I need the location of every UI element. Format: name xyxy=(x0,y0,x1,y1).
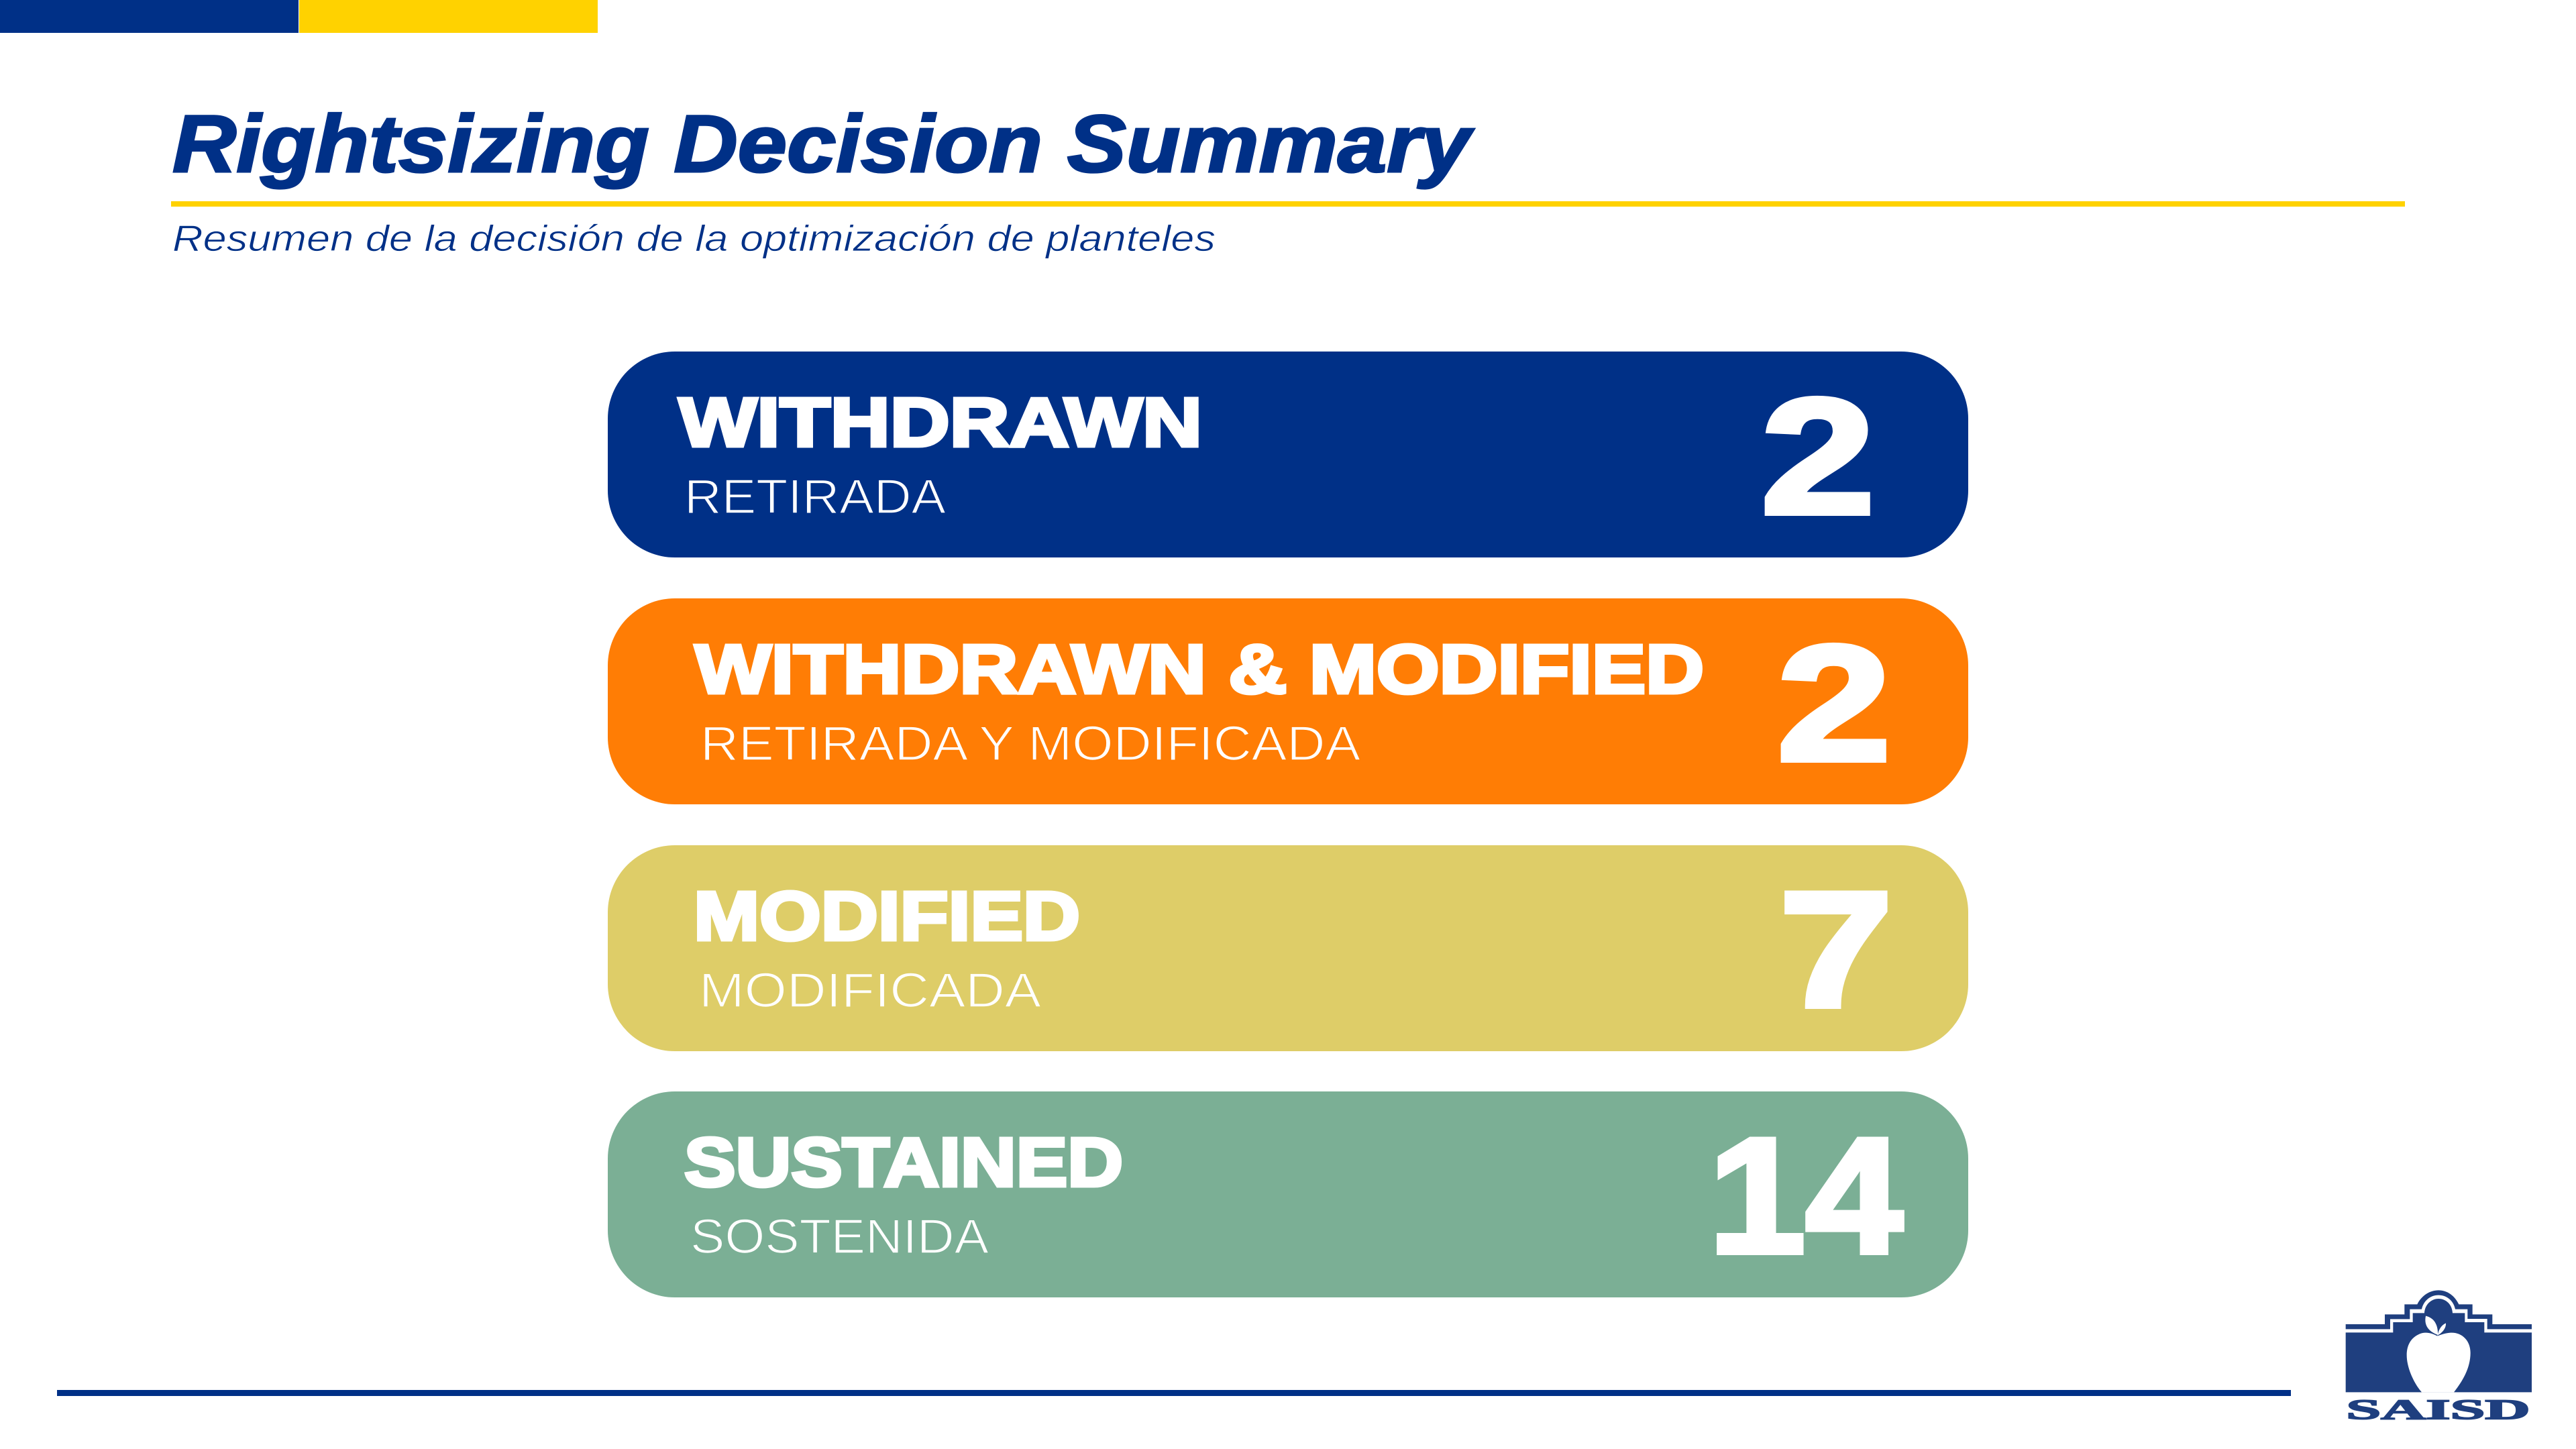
icon: SAISD logo: SAISD xyxy=(2346,1395,2530,1426)
number: 7: 7 xyxy=(1779,857,1893,1041)
title: Rightsizing Decision Summary xyxy=(172,98,1474,189)
heading: withdrawn and modified: WITHDRAWN & MODIFIED xyxy=(695,631,1704,708)
number: 2: 2 xyxy=(1761,364,1875,548)
top accent bars xyxy=(0,0,598,33)
footer line xyxy=(57,1390,2291,1396)
subtitle: Resumen de la decisión de la optimización de planteles xyxy=(172,217,1216,259)
icon: SAISD logo xyxy=(2346,1290,2532,1426)
label: sostenida: SOSTENIDA xyxy=(690,1210,989,1264)
heading: withdrawn: WITHDRAWN xyxy=(679,384,1202,461)
label: modificada: MODIFICADA xyxy=(699,964,1041,1018)
heading: modified: MODIFIED xyxy=(694,877,1080,955)
label: retirada: RETIRADA xyxy=(684,470,946,524)
number: 2: 2 xyxy=(1777,611,1891,795)
label: retirada y modificada: RETIRADA Y MODIFICADA xyxy=(700,717,1360,771)
panel: modified xyxy=(608,845,1968,1051)
panel: sustained xyxy=(608,1091,1968,1297)
number: 14: 14 xyxy=(1709,1104,1902,1287)
title underline xyxy=(171,201,2405,207)
panel: withdrawn xyxy=(608,352,1968,557)
panel: withdrawn and modified xyxy=(608,598,1968,804)
heading: sustained: SUSTAINED xyxy=(684,1124,1123,1201)
